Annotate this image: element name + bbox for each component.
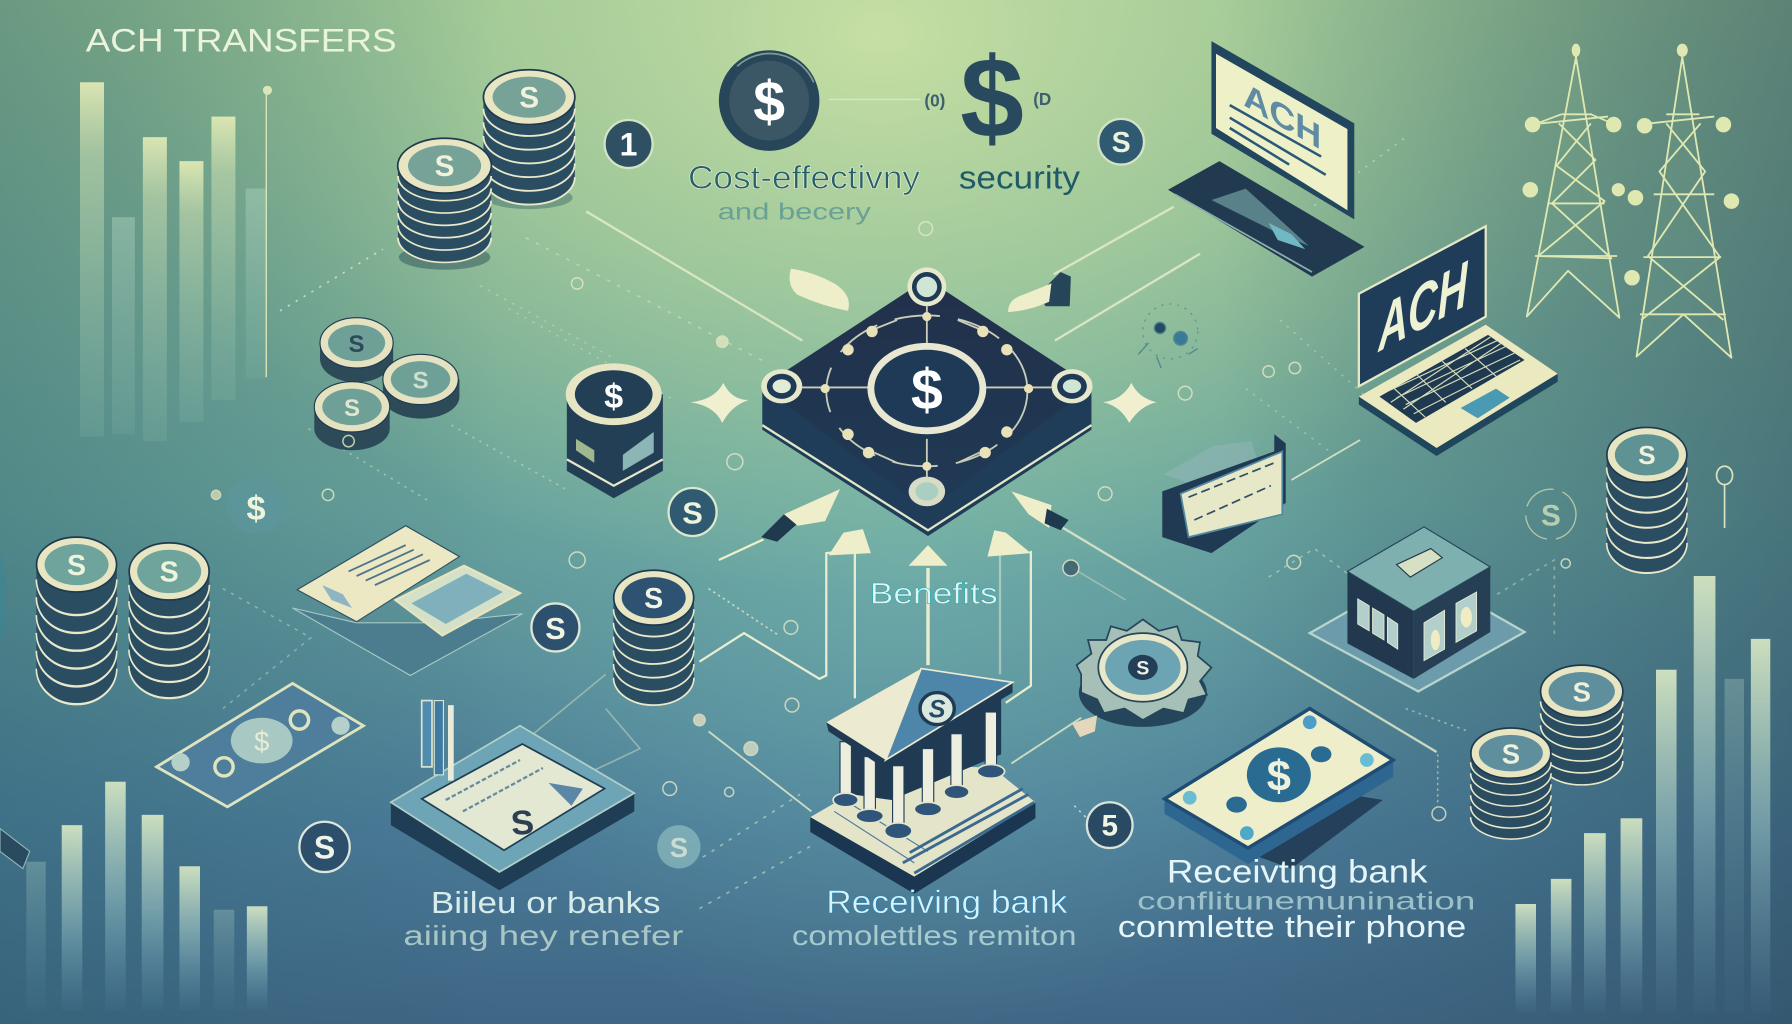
- badge: S near documents: [531, 603, 579, 651]
- coin stack: center left: [613, 570, 694, 705]
- dollar coin: top center: [719, 50, 819, 151]
- faint coin: S: [670, 832, 688, 863]
- laptop: ACH: [1359, 226, 1558, 456]
- cylinder safe: left of hub: $: [604, 378, 623, 416]
- banknote: right: [1165, 709, 1393, 869]
- faint coin: [657, 825, 701, 869]
- badge: S lower left: S: [314, 829, 335, 865]
- bar chart: bottom right: [1515, 576, 1770, 1013]
- caption: sender bank: [403, 885, 683, 951]
- circuit cluster: right of hub: [1138, 304, 1198, 368]
- pens: [422, 701, 454, 781]
- left edge fragment: top: [0, 554, 6, 640]
- coin stack: bottom right back: S: [1573, 677, 1591, 708]
- caption: receiving bank right: conflitunemunination: [1137, 888, 1475, 916]
- badge: S near safe: [669, 488, 717, 536]
- benefit text: cost-effectiveness: [688, 160, 920, 224]
- building cube: [1310, 527, 1525, 691]
- folder card reader: [1162, 434, 1286, 553]
- center coin: $: [911, 358, 943, 422]
- caption: receiving bank center: Receiving bank: [826, 884, 1069, 920]
- loose coins: S: [349, 331, 365, 358]
- benefit text: security: security: [959, 160, 1080, 196]
- badge: 5: 5: [1101, 809, 1118, 842]
- coin stack: lower left 2: [129, 543, 209, 698]
- gear coin: [1077, 619, 1211, 727]
- badge: 5: [1087, 802, 1133, 848]
- connector lines: network background: [223, 137, 1554, 909]
- loose coins: S: [344, 395, 360, 422]
- banknote: left: $: [254, 726, 269, 757]
- card terminal with pens: S: [509, 803, 536, 843]
- laptop: ACH: ACH: [1377, 247, 1468, 367]
- node bottom: [909, 477, 945, 506]
- bank building: [810, 669, 1035, 894]
- node top: [907, 267, 946, 306]
- step badge: 1: [605, 120, 653, 168]
- badge: S lower left: [299, 822, 350, 872]
- arrow: bottom left into hub: [719, 489, 840, 560]
- faint coin burst: [1526, 489, 1576, 539]
- arrow: top left into hub: [790, 269, 849, 311]
- coin stack: top back: [483, 70, 575, 209]
- dollar coin: top center: $: [753, 70, 785, 134]
- benefits label: Benefits: [870, 577, 998, 610]
- arrow: bottom right into hub: [1011, 491, 1069, 530]
- gear coin: S: [1136, 657, 1149, 679]
- title: ACH TRANSFERS: [86, 22, 397, 58]
- caption: receiving bank center: [792, 884, 1077, 951]
- coin stack: top back: S: [519, 81, 539, 114]
- line to small glyph: [829, 98, 920, 100]
- pin marker right: [1717, 466, 1733, 528]
- inner ring: [800, 306, 1051, 480]
- columns: [840, 712, 997, 830]
- step badge: 1: 1: [620, 126, 637, 162]
- node right: [1051, 369, 1093, 403]
- arrow tip to gear: [1072, 715, 1097, 737]
- node left: [761, 369, 802, 403]
- coin stack: bottom right front: [1471, 728, 1551, 839]
- document pile: [293, 526, 522, 675]
- monitor: ACH document: ACH: [1243, 74, 1321, 157]
- banknote: left: [157, 683, 363, 807]
- right-side coin stack: S: [1638, 440, 1656, 470]
- coin stack: top front: [398, 138, 491, 270]
- arrow: left star: [690, 383, 749, 423]
- badge: S near documents: S: [545, 611, 566, 646]
- benefit text: cost-effectiveness: and becery: [718, 198, 872, 224]
- center coin: [867, 343, 986, 434]
- caption: receiving bank right: [1118, 853, 1475, 944]
- small glyphs beside dollar: (0): [924, 90, 945, 110]
- roof: S: [929, 696, 946, 724]
- transmission tower: left: [1523, 45, 1624, 318]
- arrow: top right into hub: [1008, 272, 1071, 312]
- coin stack: center left: S: [644, 583, 663, 615]
- left edge fragment: bottom: [0, 829, 30, 869]
- faint dollar badge: left: $: [246, 490, 266, 528]
- caption: receiving bank center: comolettles remiton: [792, 920, 1077, 951]
- transmission tower: right: [1625, 45, 1738, 358]
- faint dollar badge: left: [226, 477, 286, 534]
- step badge: S top: S: [1112, 127, 1131, 159]
- loose coins: S: [413, 368, 429, 395]
- arrow: right star: [1103, 383, 1157, 423]
- loose coins: [314, 318, 459, 450]
- caption: receiving bank right: conmlette their phone: [1118, 909, 1466, 944]
- coin stack: bottom right back: [1541, 665, 1623, 785]
- cylinder safe: left of hub: [566, 363, 663, 498]
- small network nodes: [211, 222, 1570, 821]
- faint coin burst: S: [1541, 500, 1561, 533]
- banknote: right: $: [1267, 753, 1291, 801]
- card terminal with pens: [391, 701, 634, 890]
- bar chart: top left: [80, 82, 272, 441]
- coin stack: lower left 1: S: [67, 550, 86, 582]
- central platform: hub: [761, 267, 1093, 536]
- badge: S near safe: S: [682, 495, 703, 530]
- bar chart: bottom left: [26, 782, 267, 1010]
- small glyphs beside dollar: [924, 89, 1051, 110]
- monitor: ACH document: [1168, 41, 1365, 277]
- benefit text: cost-effectiveness: Cost-effectivny: [688, 160, 920, 196]
- small joints: [821, 312, 1033, 471]
- caption: sender bank: aiiing hey renefer: [403, 920, 683, 951]
- caption: sender bank: Biileu or banks: [431, 885, 661, 920]
- caption: receiving bank right: Receivting bank: [1167, 853, 1429, 889]
- roof: [826, 669, 1013, 769]
- coin stack: bottom right front: S: [1502, 738, 1520, 769]
- small glyphs beside dollar: (D: [1033, 89, 1051, 109]
- right-side coin stack: [1607, 427, 1687, 573]
- coin stack: top front: S: [435, 150, 454, 183]
- step badge: S top: [1098, 119, 1144, 165]
- large dollar icon: $: [960, 35, 1024, 162]
- coin stack: lower left 1: [36, 537, 117, 704]
- coin stack: lower left 2: S: [160, 557, 179, 589]
- arrows: up from bank: [699, 529, 1031, 703]
